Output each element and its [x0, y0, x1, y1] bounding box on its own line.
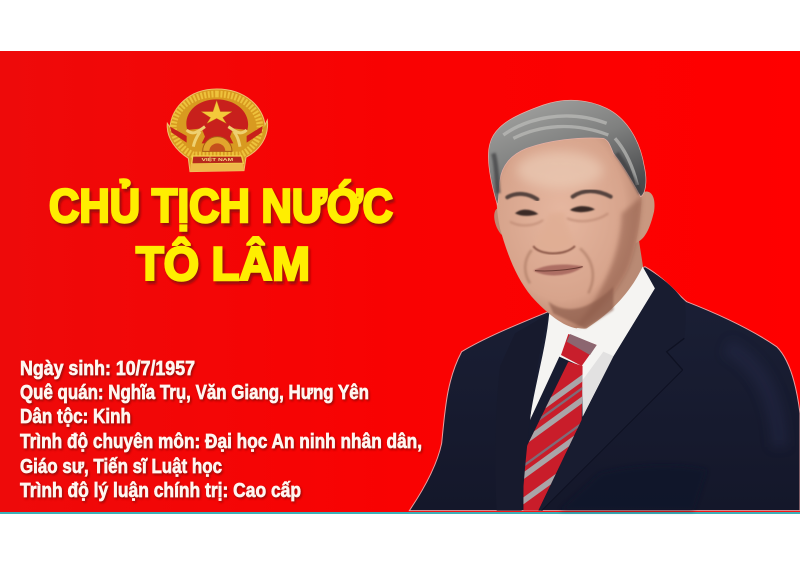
- jacket shading: [560, 465, 707, 511]
- emblem ribbon: [192, 156, 243, 164]
- forehead highlight: [517, 152, 603, 188]
- emblem red field: [186, 99, 248, 143]
- biography lines: Giáo sư, Tiến sĩ Luật học: [20, 456, 222, 478]
- biography shadow: Dân tộc: Kinh: [21, 407, 132, 429]
- portrait illustration: [409, 100, 800, 513]
- biography lines: Trình độ chuyên môn: Đại học An ninh nhân dân,: [20, 431, 422, 453]
- biography shadow: Quê quán: Nghĩa Trụ, Văn Giang, Hưng Yên: [21, 383, 370, 405]
- eyebrows: [507, 191, 611, 199]
- emblem rice stalks: [187, 127, 247, 147]
- under-chin shadow: [548, 287, 613, 328]
- emblem ribbon text: VIỆT NAM: [201, 155, 233, 163]
- jacket left lapel: [495, 313, 549, 511]
- emblem outer wreath: [167, 89, 268, 172]
- biography shadow: [21, 359, 423, 503]
- mouth: [533, 265, 583, 275]
- title block: [49, 179, 395, 293]
- ear: [635, 191, 655, 243]
- title line 1: CHỦ TỊCH NƯỚC: [49, 179, 393, 232]
- biography lines: [20, 358, 422, 502]
- necktie blade: [523, 362, 583, 511]
- hair: [488, 100, 646, 205]
- jaw shading: [575, 197, 642, 328]
- eye creases: [510, 213, 608, 225]
- biography shadow: Giáo sư, Tiến sĩ Luật học: [21, 457, 223, 479]
- hair strands: [503, 116, 637, 185]
- necktie knot: [561, 334, 597, 366]
- emblem wreath texture: [173, 94, 260, 155]
- title shadow: TÔ LÂM: [138, 240, 312, 293]
- nose: [533, 212, 575, 253]
- jacket: [409, 267, 800, 511]
- emblem side ribbons: [170, 126, 263, 143]
- neck: [545, 237, 643, 337]
- biography lines: Dân tộc: Kinh: [20, 406, 131, 428]
- title shadow: [51, 182, 395, 293]
- title line 2: TÔ LÂM: [136, 237, 310, 290]
- biography shadow: Ngày sinh: 10/7/1957: [21, 359, 196, 381]
- emblem base: [190, 163, 244, 172]
- eyes: [515, 206, 595, 216]
- biography shadow: Trình độ chuyên môn: Đại học An ninh nhân dân,: [21, 432, 423, 454]
- shirt collar and front: [530, 267, 655, 420]
- biography lines: Quê quán: Nghĩa Trụ, Văn Giang, Hưng Yên: [20, 382, 369, 404]
- emblem cog wheel: [203, 137, 232, 151]
- biography lines: Trình độ lý luận chính trị: Cao cấp: [20, 480, 301, 502]
- jacket highlight: [727, 347, 780, 447]
- biography text: [20, 358, 423, 503]
- biography lines: Ngày sinh: 10/7/1957: [20, 358, 195, 380]
- jacket right lapel: [538, 267, 686, 511]
- title shadow: CHỦ TỊCH NƯỚC: [51, 182, 395, 235]
- state emblem: [167, 89, 268, 172]
- teal bottom rule: [0, 512, 800, 514]
- shirt shadow: [583, 352, 613, 417]
- biography shadow: Trình độ lý luận chính trị: Cao cấp: [21, 481, 302, 503]
- face: [496, 130, 642, 328]
- smile lines: [525, 248, 593, 293]
- emblem gold star: [201, 101, 232, 123]
